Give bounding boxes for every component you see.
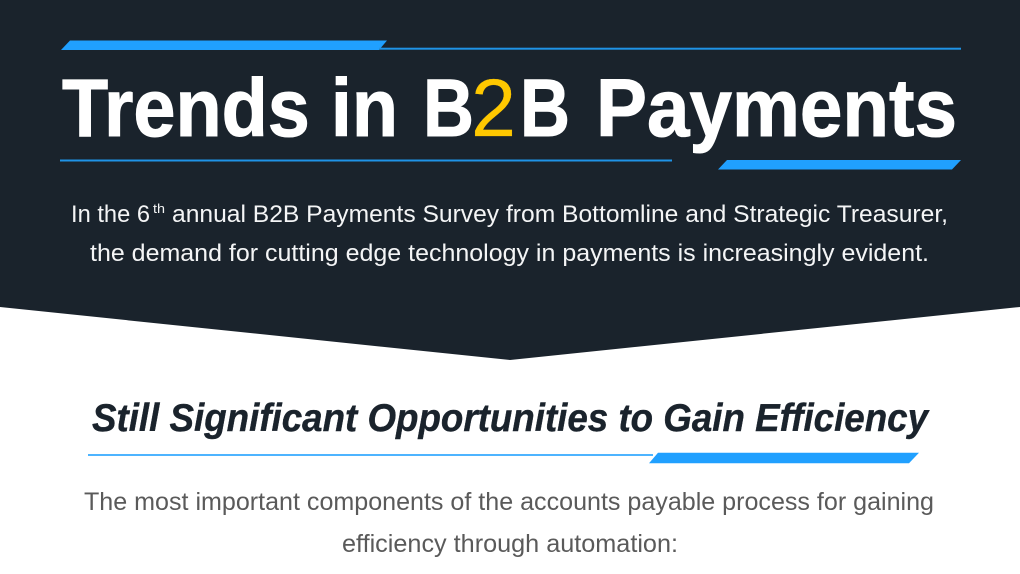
section description text: The most important components of the accounts payable process for gaining <box>84 488 934 516</box>
section description text <box>84 488 934 558</box>
title: B <box>423 63 474 154</box>
title: B <box>520 63 570 154</box>
title accent: yellow 2: 2 <box>471 63 516 154</box>
section heading underline and accent bar <box>88 453 919 463</box>
title: Trends in <box>62 63 398 154</box>
title: Payments <box>596 63 957 154</box>
section heading: Still Significant Opportunities to Gain Efficiency <box>92 397 930 440</box>
bottom accent bar with line <box>60 160 961 170</box>
subtitle text: the demand for cutting edge technology in payments is increasingly evident. <box>90 240 929 267</box>
top accent bar with line <box>61 40 961 50</box>
section description text: efficiency through automation: <box>342 530 678 558</box>
subtitle text: In the 6 <box>71 201 150 228</box>
title <box>62 63 957 154</box>
panel: dark header banner with chevron bottom <box>0 0 1020 360</box>
subtitle text <box>71 201 948 267</box>
subtitle text: annual B2B Payments Survey from Bottomline and Strategic Treasurer, <box>172 201 948 228</box>
subtitle text: th <box>153 201 165 216</box>
